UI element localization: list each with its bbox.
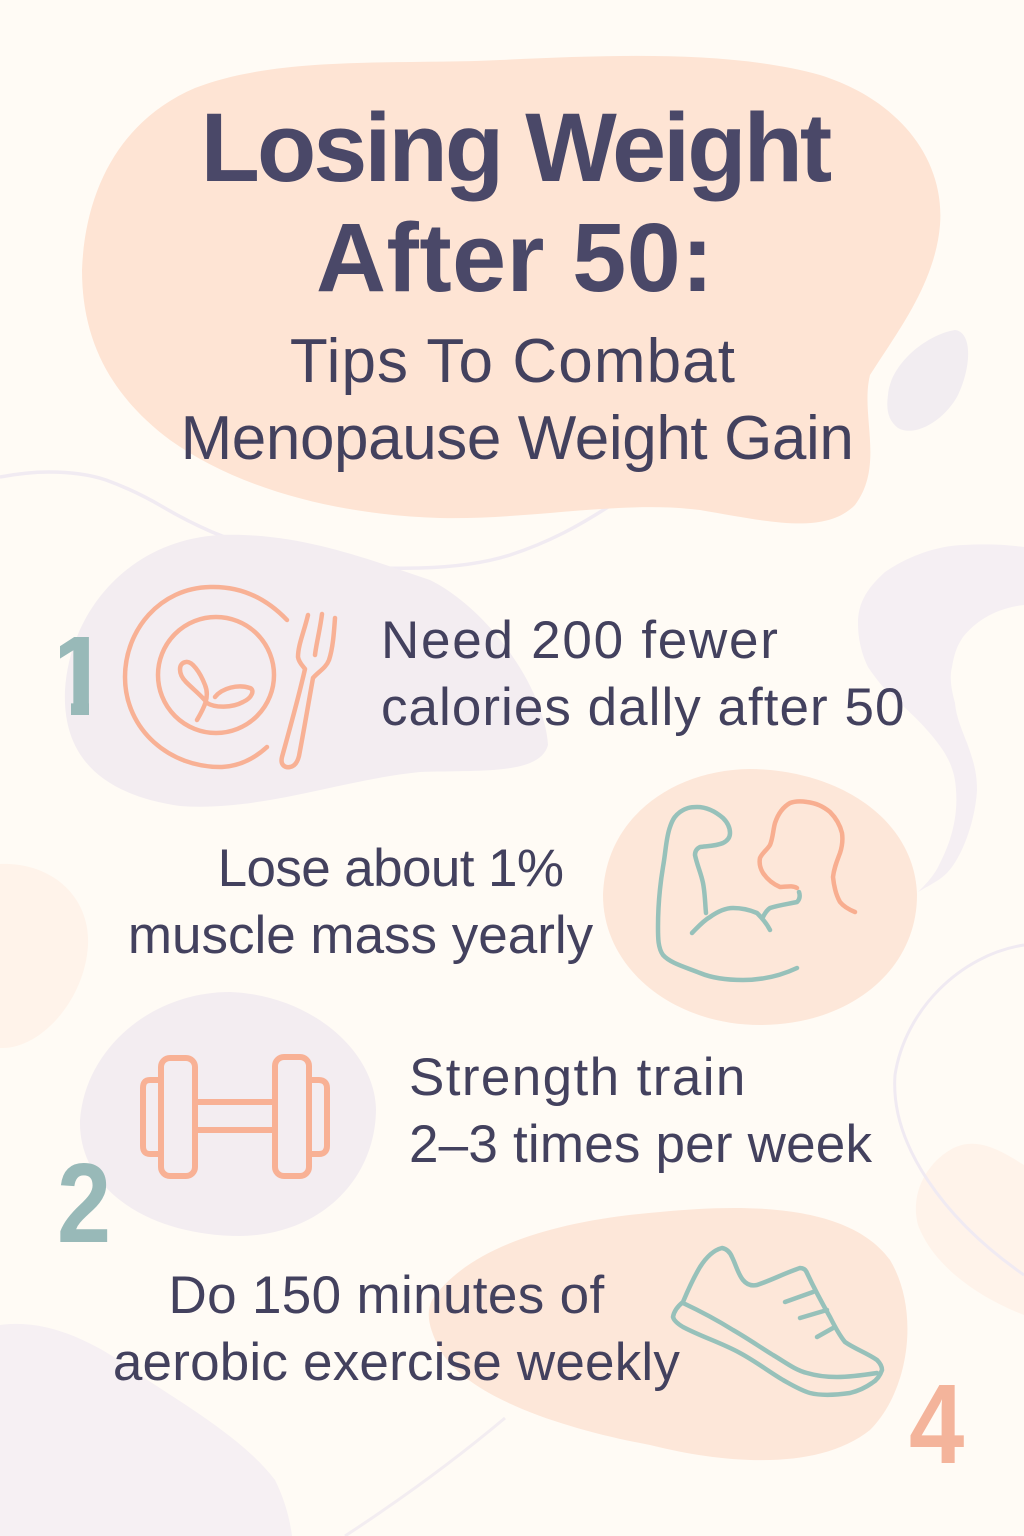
subtitle: Tips To Combat [290, 327, 736, 396]
tip 4 text [113, 1266, 680, 1392]
tip 2 text [128, 839, 593, 965]
number 1: 1 [47, 613, 110, 739]
tip 4 text: aerobic exercise weekly [113, 1333, 680, 1392]
tip 4 text: Do 150 minutes of [168, 1266, 605, 1325]
tip 1 text [381, 611, 906, 737]
tip 3 text: Strength train [409, 1048, 747, 1107]
title: After 50: [316, 203, 714, 312]
tip 3 text: 2–3 times per week [409, 1115, 872, 1174]
tip 3 text [409, 1048, 872, 1174]
number 2: 2 [57, 1140, 111, 1266]
number 4: 4 [909, 1361, 964, 1487]
tip 2 text: Lose about 1% [218, 839, 563, 898]
title: Losing Weight [201, 93, 829, 202]
tip 1 text: calories dally after 50 [381, 678, 906, 737]
tip 1 text: Need 200 fewer [381, 611, 780, 670]
tip 2 text: muscle mass yearly [128, 906, 593, 965]
subtitle: Menopause Weight Gain [181, 404, 853, 473]
subtitle [181, 327, 853, 473]
title [201, 93, 831, 312]
